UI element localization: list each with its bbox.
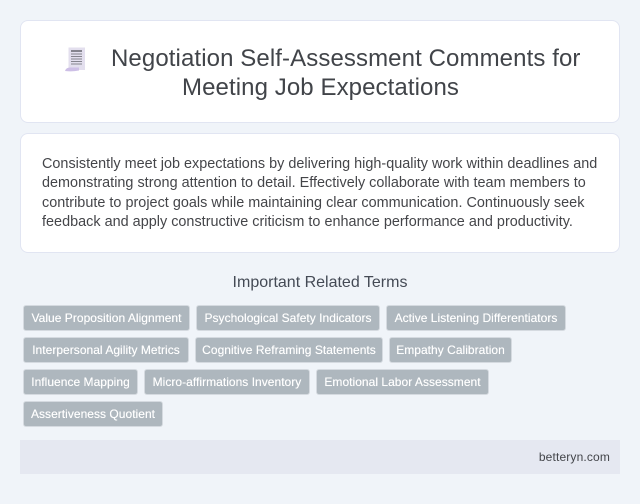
tag: Psychological Safety Indicators xyxy=(204,311,372,325)
text block: description: feedback and apply constructive criticism to enhance performance and productivity. xyxy=(42,214,573,230)
text block: description xyxy=(42,156,597,230)
tag xyxy=(23,369,138,395)
tag: Empathy Calibration xyxy=(396,343,505,357)
tag xyxy=(389,337,512,363)
tag xyxy=(23,305,190,331)
tag xyxy=(23,337,189,363)
panel: description xyxy=(20,133,620,253)
footer text: betteryn.com xyxy=(539,450,610,464)
tag xyxy=(23,401,163,427)
text block: description: demonstrating strong attention to detail. Effectively collaborate with team members to xyxy=(42,175,586,191)
tag: Cognitive Reframing Statements xyxy=(202,343,376,357)
footer xyxy=(20,440,620,474)
tag: Emotional Labor Assessment xyxy=(324,375,481,389)
icon: document scroll xyxy=(65,48,85,72)
tag xyxy=(386,305,566,331)
tag: Micro-affirmations Inventory xyxy=(153,375,301,389)
tag: Value Proposition Alignment xyxy=(31,311,182,325)
tag: Active Listening Differentiators xyxy=(395,311,557,325)
text block: description: Consistently meet job expectations by delivering high-quality work within deadlines and xyxy=(42,156,597,172)
title xyxy=(111,45,581,101)
panel: title card xyxy=(20,20,620,123)
tag: Influence Mapping xyxy=(31,375,130,389)
title: Negotiation Self-Assessment Comments for xyxy=(111,45,581,72)
text block: description: contribute to project goals while maintaining clear communication. Continuously seek xyxy=(42,195,584,211)
tag xyxy=(144,369,310,395)
tag xyxy=(195,337,383,363)
tag xyxy=(316,369,489,395)
tags: related terms xyxy=(23,305,566,427)
heading: related terms: Important Related Terms xyxy=(233,274,407,291)
title: Meeting Job Expectations xyxy=(182,74,459,101)
tag: Interpersonal Agility Metrics xyxy=(32,343,180,357)
tag xyxy=(196,305,380,331)
tag: Assertiveness Quotient xyxy=(31,407,155,421)
